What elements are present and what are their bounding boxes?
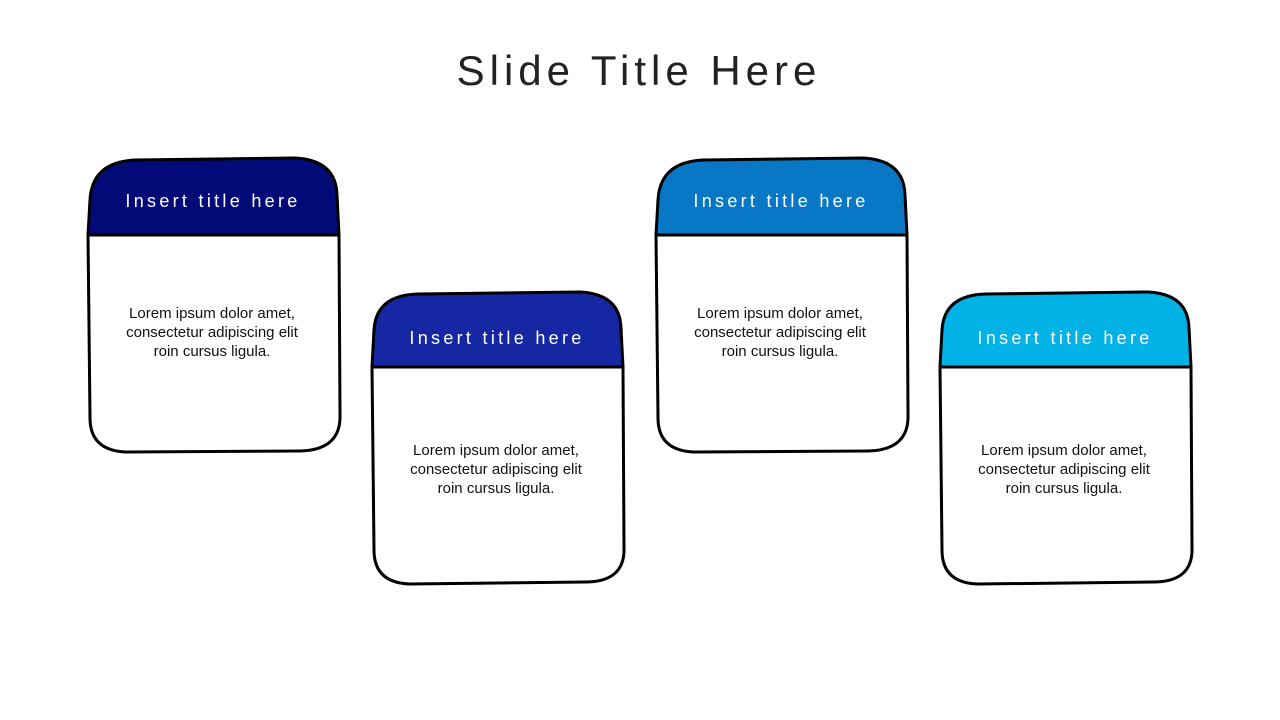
card 4 body: consectetur adipiscing elit [978, 461, 1151, 478]
title: Slide Title Here [457, 47, 821, 94]
card 3 body: Lorem ipsum dolor amet, [697, 305, 863, 322]
card 2 [372, 292, 624, 584]
card 3 [656, 158, 908, 452]
card 4 [940, 292, 1192, 584]
card 2 body: roin cursus ligula. [438, 480, 554, 497]
card 2 body: consectetur adipiscing elit [410, 461, 583, 478]
card 4 body: roin cursus ligula. [1006, 480, 1122, 497]
card 3 body: roin cursus ligula. [722, 343, 838, 360]
card 3 title: Insert title here [693, 191, 869, 211]
card 4 title: Insert title here [977, 328, 1153, 348]
card 2 title: Insert title here [409, 328, 585, 348]
card 2 body: Lorem ipsum dolor amet, [413, 442, 579, 459]
card 3 body: consectetur adipiscing elit [694, 324, 867, 341]
card 4 body: Lorem ipsum dolor amet, [981, 442, 1147, 459]
card 1 body: consectetur adipiscing elit [126, 324, 299, 341]
card 1 body: roin cursus ligula. [154, 343, 270, 360]
card 1 title: Insert title here [125, 191, 301, 211]
card 1 [88, 158, 340, 452]
card 1 body: Lorem ipsum dolor amet, [129, 305, 295, 322]
